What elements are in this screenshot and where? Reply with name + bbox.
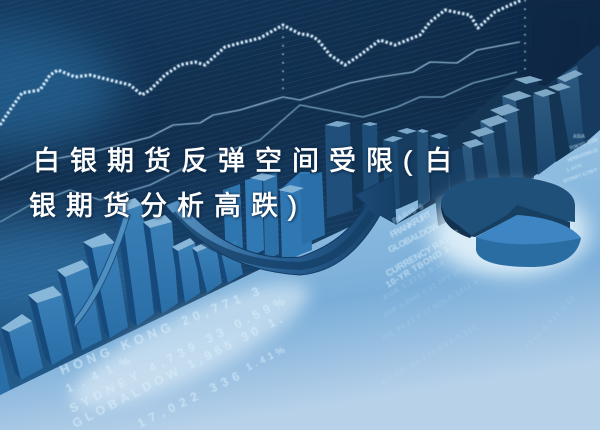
data text on plane: FTSE 6,812 1.12 [524, 295, 576, 351]
bright price line [0, 0, 522, 125]
pie body [441, 177, 575, 237]
thin rising ribbon [74, 215, 130, 328]
data text on plane: OIL 94.21 0.77 GOLD 1312.4 [381, 279, 479, 342]
mid bars behind text [223, 121, 449, 262]
data text on plane [58, 134, 599, 430]
bar tops [430, 70, 583, 151]
data text on plane: 17,022 336 [135, 369, 242, 430]
data text on plane: PARIS 5 [391, 202, 425, 226]
data text on plane: ASIA [573, 134, 585, 140]
data text on plane: EUR 1.3712 0.18 [382, 260, 446, 302]
data text on plane: CURRENCY RATES [384, 228, 462, 280]
light perspective plane [0, 110, 600, 430]
data text on plane: HONG KONG 20,771 3 [58, 284, 262, 378]
icon: rising curved arrow [74, 176, 396, 328]
pie cut slice top [470, 205, 570, 237]
pie chart with glow [418, 177, 600, 284]
data text on plane: 1.41% [244, 345, 287, 374]
data text on plane: FRANKFURT [388, 208, 434, 240]
data text on plane: NIKKEI 14,223 DAX 9,120 [380, 324, 478, 387]
title: 银期货分析高跌) [29, 191, 307, 221]
thick swoosh band [165, 176, 396, 275]
data text on plane: GLOBALDOW 1,965 30 1. [70, 312, 285, 430]
data text on plane: 1.41% [566, 163, 583, 174]
plane highlight [59, 261, 321, 429]
middle line [0, 42, 520, 180]
title: 白银期货反弹空间受限(白 [33, 146, 462, 176]
data text on plane: 1.41% [63, 353, 133, 396]
vertical dotted axis [283, 0, 525, 90]
lower-left bars [0, 198, 243, 395]
data text on plane: HONG KONG 22 [567, 147, 599, 164]
data text on plane: CHF 1.2040 0.32 JPY 101.7 [382, 262, 472, 320]
data text on plane: SYDNEY 4,739 P [563, 167, 599, 185]
data text on plane: GLOBALDOW [386, 220, 441, 255]
data text on plane: SYDNEY 4,739 33 0.59% [67, 294, 287, 416]
data text on plane: 10-YR TBOND 3.37 [384, 237, 463, 290]
upper-right bars [395, 45, 600, 226]
data text on plane: TOKYO 8,495 [569, 137, 599, 152]
detached slice [476, 215, 581, 267]
line charts on dark panel [0, 0, 525, 222]
lower line [0, 72, 517, 222]
